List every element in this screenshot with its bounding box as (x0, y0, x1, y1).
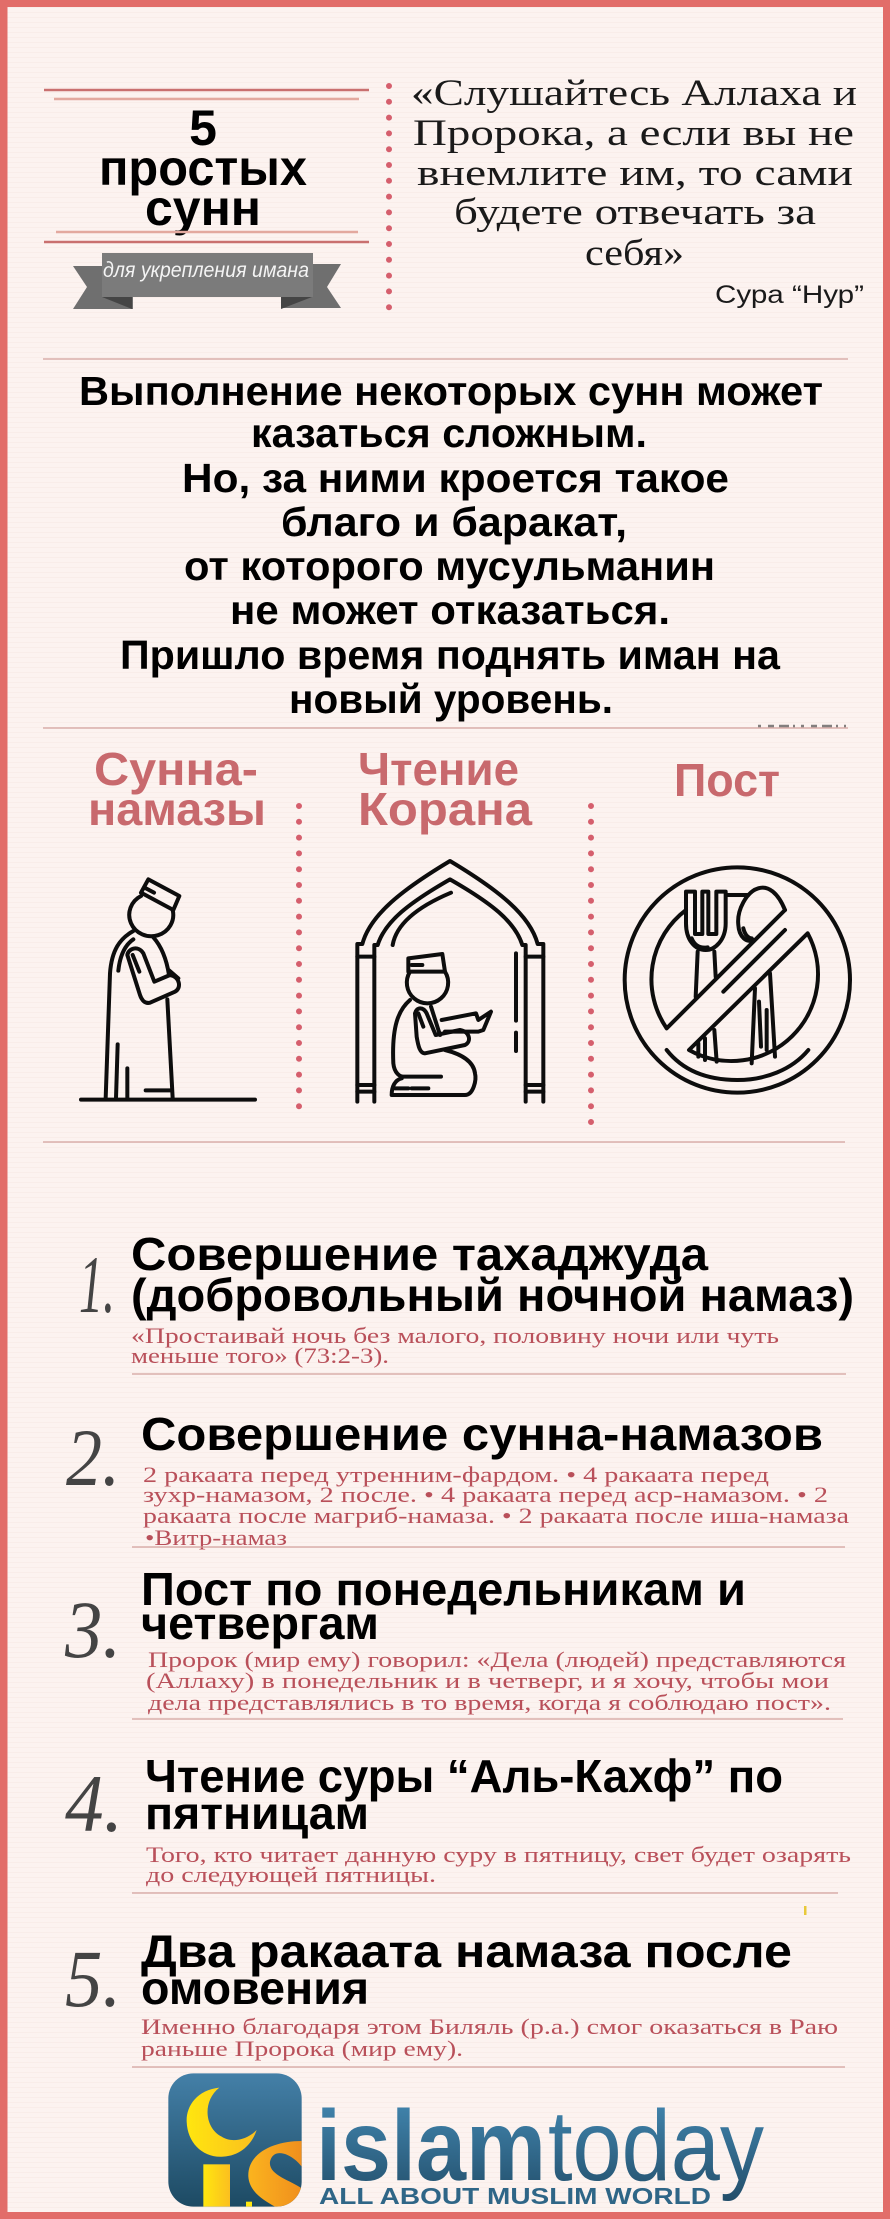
heading (358, 743, 532, 835)
heading: (добровольный ночной намаз) (131, 1269, 854, 1321)
body text (141, 2014, 838, 2061)
title: 5 простых сунн: простых (99, 140, 307, 196)
title block (44, 90, 369, 309)
quote: «Слушайтесь Аллаха и (411, 73, 857, 114)
heading: Совершение сунна-намазов (141, 1408, 823, 1460)
item 1 (79, 1228, 854, 1374)
logo wordmark: islam (316, 2090, 546, 2202)
intro text: новый уровень. (289, 676, 613, 722)
intro text: благо и баракат, (281, 499, 627, 545)
heading: пятницам (145, 1787, 369, 1839)
number: 5. (65, 1933, 121, 2024)
body text: дела представлялись в то время, когда я соблюдаю пост». (148, 1690, 831, 1715)
heading (141, 1563, 746, 1649)
item 4 (65, 1750, 851, 1893)
body text: раньше Пророка (мир ему). (141, 2036, 463, 2061)
heading (141, 1925, 792, 2014)
quote: себя» (585, 233, 684, 274)
heading: Корана (358, 783, 532, 835)
number: 4. (65, 1758, 123, 1849)
body text: •Витр-намаз (145, 1525, 287, 1550)
quote source: Сура “Нур” (715, 281, 864, 309)
body text: «Простаивай ночь без малого, половину ночи или чуть (131, 1323, 779, 1348)
heading: Пост (674, 754, 780, 806)
number: 3. (64, 1584, 121, 1675)
body text: ракаата после магриб-намаза. • 2 ракаата после иша-намаза (143, 1503, 849, 1528)
intro text (79, 368, 823, 722)
heading: Чтение (358, 743, 519, 795)
heading: Пост по понедельникам и (141, 1563, 746, 1615)
logo tagline: ALL ABOUT MUSLIM WORLD (319, 2183, 711, 2209)
body text: Пророк (мир ему) говорил: «Дела (людей) представляются (148, 1647, 846, 1672)
heading: Сунна- (94, 743, 258, 795)
icon: standing man (81, 879, 255, 1100)
quote: Пророка, а если вы не (413, 113, 854, 154)
number: 1. (79, 1239, 115, 1330)
item 5 (65, 1925, 845, 2067)
body text: (Аллаху) в понедельник и в четверг, и я хочу, чтобы мои (146, 1668, 829, 1693)
heading (131, 1228, 854, 1321)
title: 5 простых сунн (99, 100, 307, 236)
quote (411, 73, 864, 309)
body text: Именно благодаря этом Биляль (р.а.) смог оказаться в Раю (141, 2014, 838, 2039)
icon: reading man in arch (357, 861, 543, 1102)
heading: Два ракаата намаза после (141, 1925, 792, 1977)
heading: намазы (88, 783, 266, 835)
body text: зухр-намазом, 2 после. • 4 ракаата перед аср-намазом. • 2 (143, 1482, 828, 1507)
ribbon subtitle: для укрепления имана (103, 259, 309, 282)
body text: Того, кто читает данную суру в пятницу, свет будет озарять (146, 1842, 851, 1867)
quote: будете отвечать за (454, 192, 816, 233)
body text (143, 1462, 849, 1550)
body text (146, 1842, 851, 1887)
heading: Чтение суры “Аль-Кахф” по (145, 1750, 783, 1802)
logo wordmark: today (548, 2090, 764, 2202)
body text: меньше того» (73:2-3). (131, 1343, 389, 1368)
logo icon (168, 2073, 302, 2207)
item 2 (66, 1408, 849, 1550)
body text: 2 ракаата перед утренним-фардом. • 4 ракаата перед (143, 1462, 769, 1487)
quote: внемлите им, то сами (417, 153, 853, 194)
ribbon subtitle (73, 253, 341, 309)
title: 5 простых сунн: сунн (145, 180, 261, 236)
title: 5 простых сунн: 5 (189, 100, 217, 156)
intro text: не может отказаться. (230, 587, 670, 633)
body text: до следующей пятницы. (146, 1862, 436, 1887)
body text (131, 1323, 779, 1368)
intro text: Пришло время поднять иман на (120, 632, 781, 678)
heading (88, 743, 266, 835)
panel: пост (625, 754, 850, 1093)
heading (145, 1750, 783, 1839)
number: 2. (66, 1412, 120, 1503)
intro text: казаться сложным. (251, 410, 647, 456)
heading: четвергам (141, 1597, 379, 1649)
heading: омовения (141, 1962, 369, 2014)
item 3 (64, 1563, 846, 1719)
intro text: Но, за ними кроется такое (182, 455, 729, 501)
icon: no food (625, 867, 850, 1093)
body text (146, 1647, 846, 1715)
panel: чтение корана (357, 743, 543, 1102)
heading: Совершение тахаджуда (131, 1228, 708, 1280)
intro text: от которого мусульманин (184, 543, 715, 589)
intro text: Выполнение некоторых сунн может (79, 368, 823, 414)
logo wordmark (316, 2090, 764, 2202)
panel: сунна-намазы (81, 743, 266, 1100)
logo: islamtoday (168, 2073, 764, 2209)
